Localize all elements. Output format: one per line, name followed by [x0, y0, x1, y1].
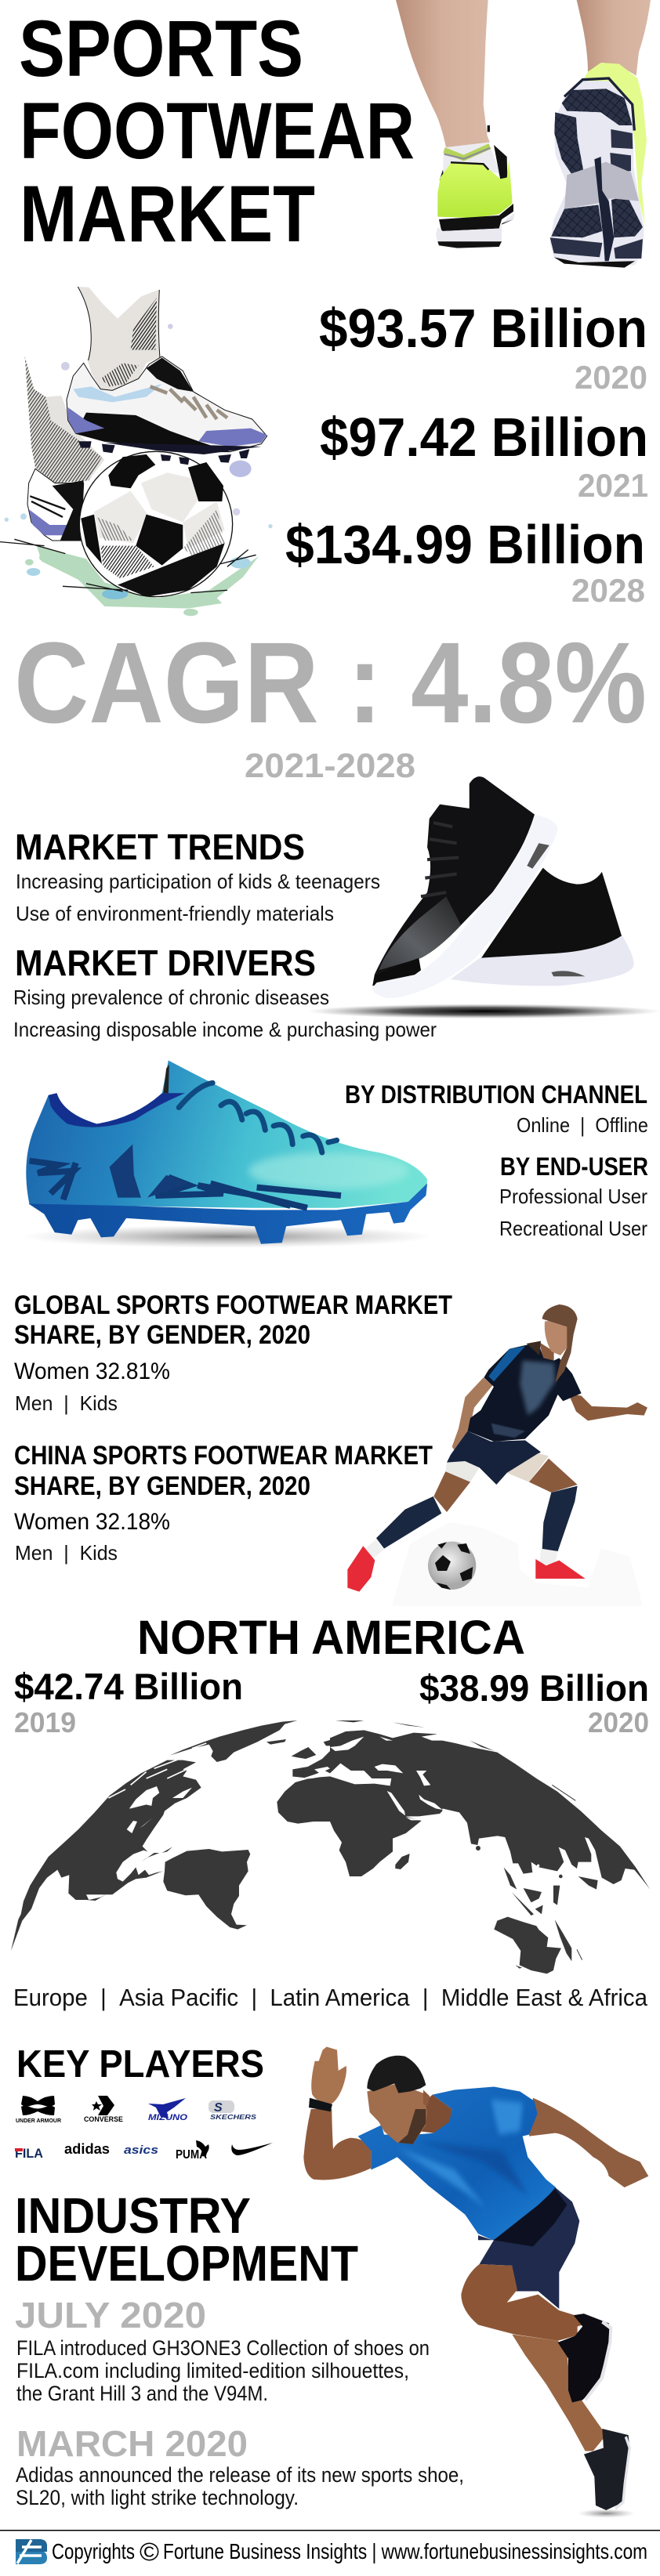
grass and paint splashes: [5, 324, 273, 616]
development: July 2020: JULY 2020: [15, 2295, 206, 2335]
logo: Puma: [176, 2140, 209, 2162]
key players: KEY PLAYERS: [16, 2043, 264, 2086]
global share by gender: Men | Kids: [15, 1391, 118, 1415]
front sock: [78, 287, 160, 390]
Australia: [494, 1917, 561, 1974]
market trends: Use of environment-friendly materials: [16, 902, 334, 925]
development: July 2020: FILA introduced GH3ONE3 Collection of shoes on: [16, 2336, 430, 2360]
north america 2019 value: 2019: [14, 1706, 76, 1738]
footer: Copyrights: [52, 2539, 135, 2563]
development: July 2020: [15, 2295, 430, 2405]
by end-user: Recreational User: [499, 1217, 647, 1240]
development: March 2020: MARCH 2020: [16, 2423, 248, 2464]
logo: Skechers: SKECHERS: [210, 2114, 257, 2121]
market drivers: Increasing disposable income & purchasing power: [13, 1018, 437, 1041]
logo: FILA: FILA: [15, 2146, 43, 2161]
stat: 2020 market size: [319, 298, 647, 396]
development: March 2020: Adidas announced the release of its new sports shoe,: [16, 2463, 464, 2487]
north america 2020 value: [419, 1667, 649, 1738]
logo: Nike swoosh: [231, 2143, 273, 2155]
football: [428, 1542, 476, 1590]
market trends: [15, 827, 380, 925]
title: MARKET: [20, 169, 315, 259]
market trends: MARKET TRENDS: [15, 827, 305, 867]
world map: [11, 1720, 650, 1974]
logo: Under Armour: UNDER ARMOUR: [16, 2118, 61, 2124]
global share by gender: Women 32.81%: [14, 1359, 170, 1384]
stat: 2020 market size: 2020: [575, 359, 647, 396]
logo: Under Armour: [16, 2096, 61, 2124]
image: black sneakers: [307, 776, 660, 1018]
logo: Mizuno: [148, 2098, 188, 2122]
north america 2019 value: [14, 1666, 243, 1738]
stat: 2028 market size: 2028: [571, 572, 645, 609]
north america 2019 value: $42.74 Billion: [14, 1666, 243, 1707]
image: running legs with neon shoes: [396, 0, 651, 268]
market trends: Increasing participation of kids & teenagers: [16, 870, 380, 893]
title: [19, 4, 415, 259]
china share by gender: [14, 1441, 433, 1565]
map west: Americas and Greenland: [11, 1720, 297, 1951]
South America: [163, 1849, 250, 1930]
stat: 2020 market size: $93.57 Billion: [319, 298, 647, 359]
industry development heading: [15, 2187, 358, 2292]
china share by gender: Men | Kids: [15, 1541, 118, 1565]
ball: [79, 451, 233, 597]
industry development heading: INDUSTRY: [15, 2187, 251, 2244]
logo: adidas: adidas: [64, 2141, 110, 2157]
inland seas: [291, 1737, 442, 1820]
global share by gender: SHARE, BY GENDER, 2020: [14, 1320, 310, 1350]
footer: ©: [140, 2538, 159, 2566]
north america heading: NORTH AMERICA: [137, 1611, 525, 1664]
logo: asics: asics: [124, 2144, 158, 2157]
global share by gender: GLOBAL SPORTS FOOTWEAR MARKET: [14, 1290, 452, 1320]
icon: Fortune Business Insights logo: [16, 2539, 47, 2564]
logo: Skechers: [209, 2100, 257, 2121]
rear leg: [25, 356, 104, 541]
market drivers: Rising prevalence of chronic diseases: [13, 986, 329, 1009]
grass strokes: [0, 539, 256, 593]
stat: 2028 market size: [285, 514, 645, 609]
development: July 2020: FILA.com including limited-edition silhouettes,: [16, 2359, 409, 2382]
by end-user: Professional User: [499, 1185, 647, 1208]
market drivers: [13, 942, 437, 1041]
stat: 2028 market size: $134.99 Billion: [285, 514, 645, 575]
development: March 2020: [16, 2423, 464, 2509]
image: female football player: [347, 1304, 647, 1606]
logo: Converse: [84, 2096, 123, 2123]
market drivers: MARKET DRIVERS: [15, 942, 316, 983]
image: sprinter: [303, 2046, 648, 2518]
image: blue football boot: [21, 1060, 433, 1248]
china share by gender: Women 32.18%: [14, 1509, 170, 1535]
by end-user: [499, 1152, 648, 1240]
by distribution channel: [345, 1080, 648, 1137]
industry development heading: DEVELOPMENT: [15, 2235, 358, 2292]
logo: Puma: PUMA: [176, 2148, 207, 2162]
CAGR headline: 2021-2028: [245, 747, 415, 785]
map east: Europe, Africa, Asia and Oceania: [277, 1720, 650, 1974]
image: sketched football boot on ball: [0, 287, 273, 616]
stat: 2021 market size: $97.42 Billion: [320, 407, 648, 468]
logo: Converse: CONVERSE: [84, 2115, 123, 2123]
logo: Skechers: S: [214, 2101, 223, 2115]
boot: [67, 356, 267, 465]
development: July 2020: the Grant Hill 3 and the V94M.: [16, 2382, 268, 2405]
title: FOOTWEAR: [20, 86, 415, 175]
global share by gender: [14, 1290, 452, 1415]
china share by gender: SHARE, BY GENDER, 2020: [14, 1471, 310, 1501]
logo: Mizuno: MIZUNO: [148, 2113, 188, 2122]
north america 2020 value: 2020: [588, 1706, 649, 1738]
key players: [15, 2043, 273, 2162]
stat: 2021 market size: 2021: [578, 467, 648, 504]
stat: 2021 market size: [320, 407, 648, 504]
china share by gender: CHINA SPORTS FOOTWEAR MARKET: [14, 1441, 433, 1471]
by distribution channel: Online | Offline: [517, 1113, 648, 1137]
footer: [0, 2530, 660, 2566]
title: SPORTS: [19, 4, 303, 93]
north america 2020 value: $38.99 Billion: [419, 1667, 649, 1709]
development: March 2020: SL20, with light strike technology.: [16, 2486, 299, 2509]
